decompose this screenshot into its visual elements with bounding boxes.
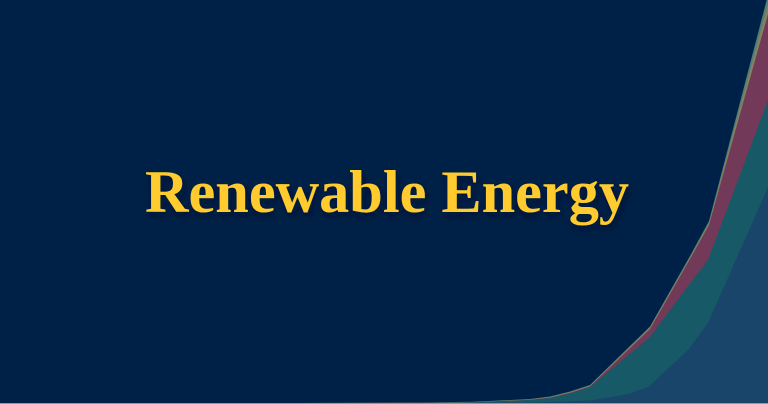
chart: outer green area edge <box>300 0 768 403</box>
baseline strip <box>0 403 768 404</box>
chart: teal area <box>300 100 768 403</box>
chart: maroon area <box>300 14 768 403</box>
chart: blue area <box>430 187 768 403</box>
title: Renewable Energy <box>145 159 629 225</box>
chart: olive area edge <box>300 4 768 403</box>
